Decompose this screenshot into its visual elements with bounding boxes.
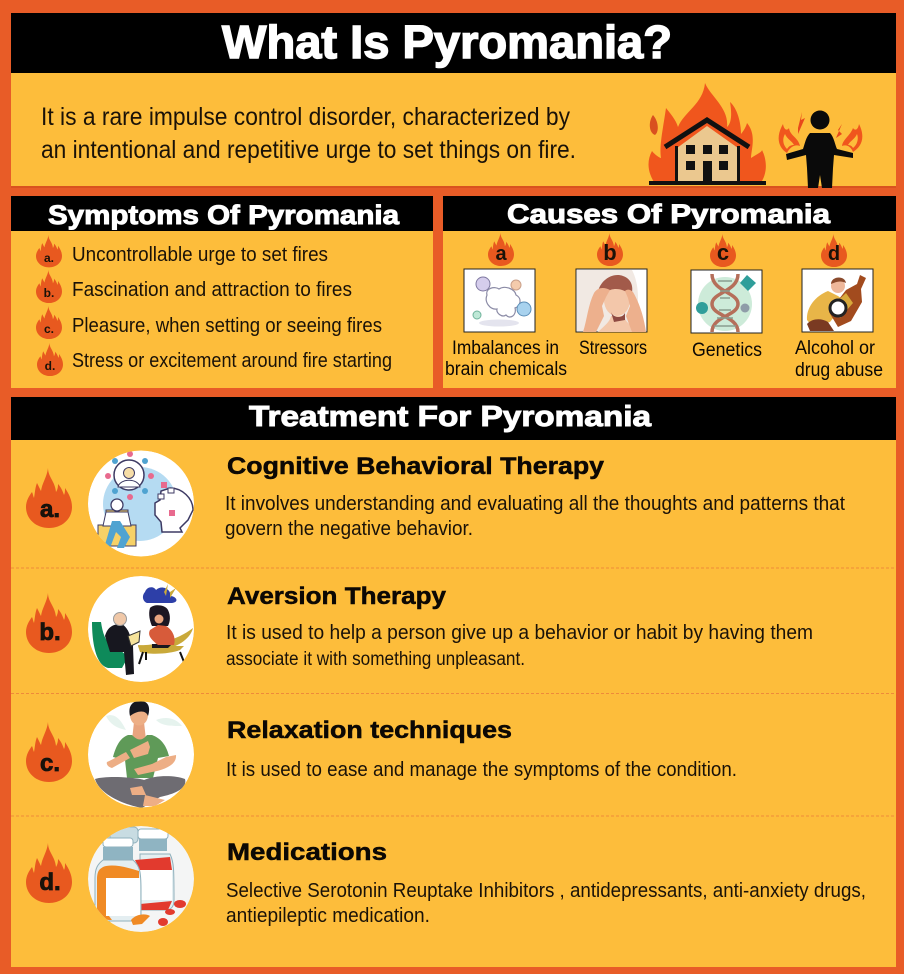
description [225,493,845,540]
treatment c: relaxation techniques [26,701,737,808]
symptom b: Fascination and attraction to fires [72,279,352,301]
cause a: brain chemicals [445,233,567,380]
description [226,880,866,927]
description [226,622,813,670]
cause c: genetics: Genetics [692,340,762,361]
cause d: alcohol or drug abuse [795,234,883,381]
heading: causes: Causes Of Pyromania [507,199,831,229]
cause a: brain chemicals: Imbalances in [452,338,559,359]
heading: symptoms: Symptoms Of Pyromania [48,200,400,230]
cause c: genetics [691,234,762,361]
panel: what is pyromania [11,13,896,188]
heading: relaxation techniques: Relaxation techniques [227,717,512,744]
heading: aversion therapy: Aversion Therapy [227,583,447,610]
icon: flame b [26,593,72,653]
description: Selective Serotonin Reuptake Inhibitors , antidepressants, anti-anxiety drugs, [226,880,866,902]
heading: medications: Medications [227,839,387,866]
symptom d [37,343,392,376]
icon: person with fire in hands [779,110,862,188]
definition text: It is a rare impulse control disorder, characterized by [41,103,570,131]
icon: flame b: b. [39,619,61,646]
icon: flame d [26,843,72,903]
cause c: genetics: c [717,240,729,265]
cause b: stressors [576,233,647,359]
illustration: therapy circle [88,450,194,556]
description: It is used to ease and manage the symptoms of the condition. [226,759,737,781]
cause d: alcohol or drug abuse: d [828,243,840,265]
symptom c [36,306,382,339]
symptom d: d. [45,359,55,373]
cause b: stressors: b [603,240,617,265]
heading: treatment: Treatment For Pyromania [249,401,652,433]
heading: cognitive behavioral therapy: Cognitive Behavioral Therapy [227,453,605,480]
description: It is used to help a person give up a behavior or habit by having them [226,622,813,644]
treatment d: medications [26,826,866,932]
description: antiepileptic medication. [226,905,430,927]
description: associate it with something unpleasant. [226,649,525,670]
symptom c: c. [44,322,54,336]
symptom a [36,235,328,267]
cause d: alcohol or drug abuse: Alcohol or [795,338,876,359]
symptom b: b. [44,286,54,300]
illustration: meditating person [88,701,194,808]
icon: flame d: d. [39,869,61,896]
definition text [41,103,576,164]
treatment a: cognitive behavioral therapy [26,450,845,556]
panel: treatment [11,397,896,967]
icon: flame c: c. [40,750,60,777]
panel: symptoms [11,196,433,388]
symptom c: Pleasure, when setting or seeing fires [72,315,382,337]
title: What Is Pyromania? [222,16,672,68]
symptom b [36,270,352,303]
description: govern the negative behavior. [225,518,473,540]
illustration: pill bottles [88,826,194,932]
cause b: stressors: Stressors [579,338,647,359]
treatment b: aversion therapy [26,576,813,682]
symptom d: Stress or excitement around fire starting [72,350,392,372]
icon: burning house [649,83,766,185]
cause d: alcohol or drug abuse: drug abuse [795,360,883,381]
definition text: an intentional and repetitive urge to set things on fire. [41,136,576,164]
icon: flame a [26,468,72,528]
illustration: therapist and patient [88,576,194,682]
symptom a: Uncontrollable urge to set fires [72,244,328,266]
panel: causes [443,196,896,388]
icon: flame c [26,722,72,782]
symptom a: a. [44,251,54,265]
description: It involves understanding and evaluating all the thoughts and patterns that [225,493,845,515]
cause a: brain chemicals: a [495,243,507,265]
cause a: brain chemicals: brain chemicals [445,359,567,380]
icon: flame a: a. [40,496,60,523]
